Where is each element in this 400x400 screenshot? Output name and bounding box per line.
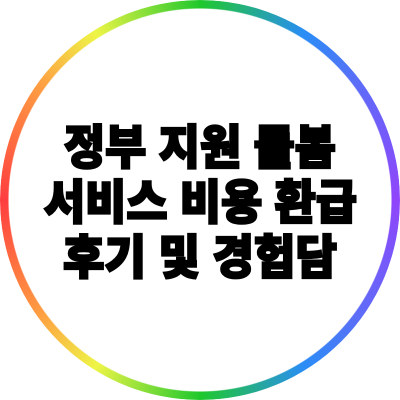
- title: 정부 지원 돌봄: [64, 121, 336, 174]
- title: 서비스 비용 환급: [44, 176, 357, 229]
- title: 후기 및 경험담: [63, 231, 337, 284]
